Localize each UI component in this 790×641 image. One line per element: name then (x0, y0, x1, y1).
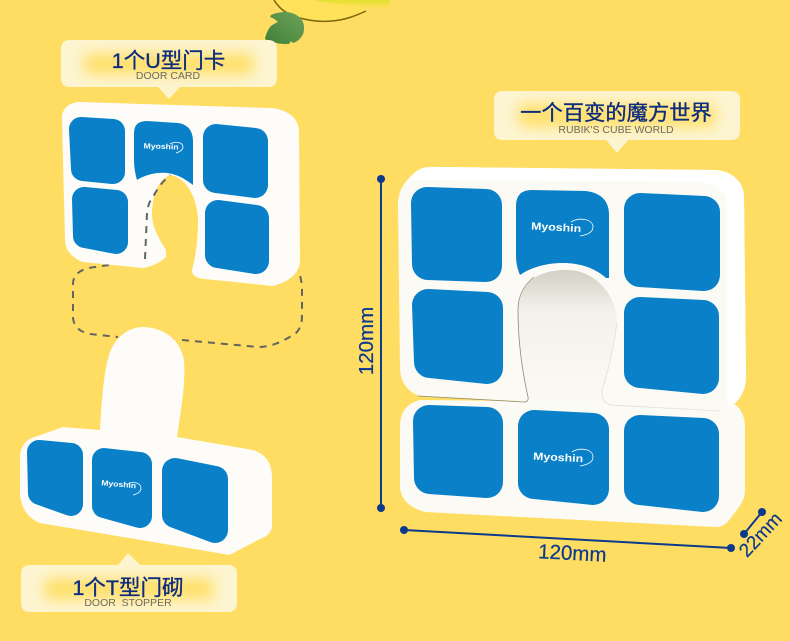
blue panel: bottom right (218, 213, 256, 261)
product: T door stopper (20, 327, 272, 555)
label: door card (61, 40, 277, 99)
door opening (518, 270, 617, 406)
label: door card: 1个U型门卡 (112, 49, 225, 73)
product: U door card (62, 102, 300, 286)
blue panel: middle with logo (101, 460, 141, 516)
blue panel (640, 431, 703, 496)
dimension: height 120mm: 120mm (355, 307, 378, 375)
top highlight edge (409, 167, 746, 405)
label: door stopper: 1个T型门砌 (72, 576, 184, 600)
blue panel: bottom left (84, 199, 116, 242)
product: assembled cube (398, 167, 746, 527)
decorative lemon with leaf (265, 0, 390, 44)
dashed connector: U card to T stopper (73, 265, 302, 347)
logo: Myoshin (143, 141, 179, 152)
blue panel (640, 209, 704, 275)
logo: Myoshin (533, 451, 583, 465)
blue panel (429, 421, 487, 482)
blue panel: right (175, 471, 215, 530)
upper U piece (398, 167, 746, 411)
logo: Myoshin (101, 478, 137, 490)
label: rubik's cube world (494, 91, 740, 153)
blue panel: left (39, 452, 71, 504)
dimension: depth 22mm: 22mm (735, 509, 787, 562)
lower T piece (400, 400, 745, 527)
dashes across the notch (145, 175, 170, 259)
blue panel (427, 203, 486, 266)
blue panel with logo (516, 190, 609, 278)
blue panel: top left (81, 129, 113, 172)
logo: Myoshin (531, 220, 581, 235)
dimension: width 120mm: 120mm (538, 540, 607, 567)
label: door card: DOOR CARD (136, 70, 201, 82)
blue panel (428, 305, 487, 368)
dimension: height 120mm (355, 175, 385, 512)
blue panel (640, 313, 703, 378)
blue panel: top right (216, 137, 255, 185)
label: door stopper: DOOR STOPPER (84, 597, 172, 609)
label: door stopper (21, 553, 237, 612)
dimension: width 120mm (400, 526, 735, 567)
label: rubik's cube world: 一个百变的魔方世界 (520, 101, 712, 125)
blue panel: top centre with logo (134, 121, 193, 185)
label: rubik's cube world: RUBIK'S CUBE WORLD (558, 124, 674, 136)
blue panel with logo (533, 426, 593, 489)
